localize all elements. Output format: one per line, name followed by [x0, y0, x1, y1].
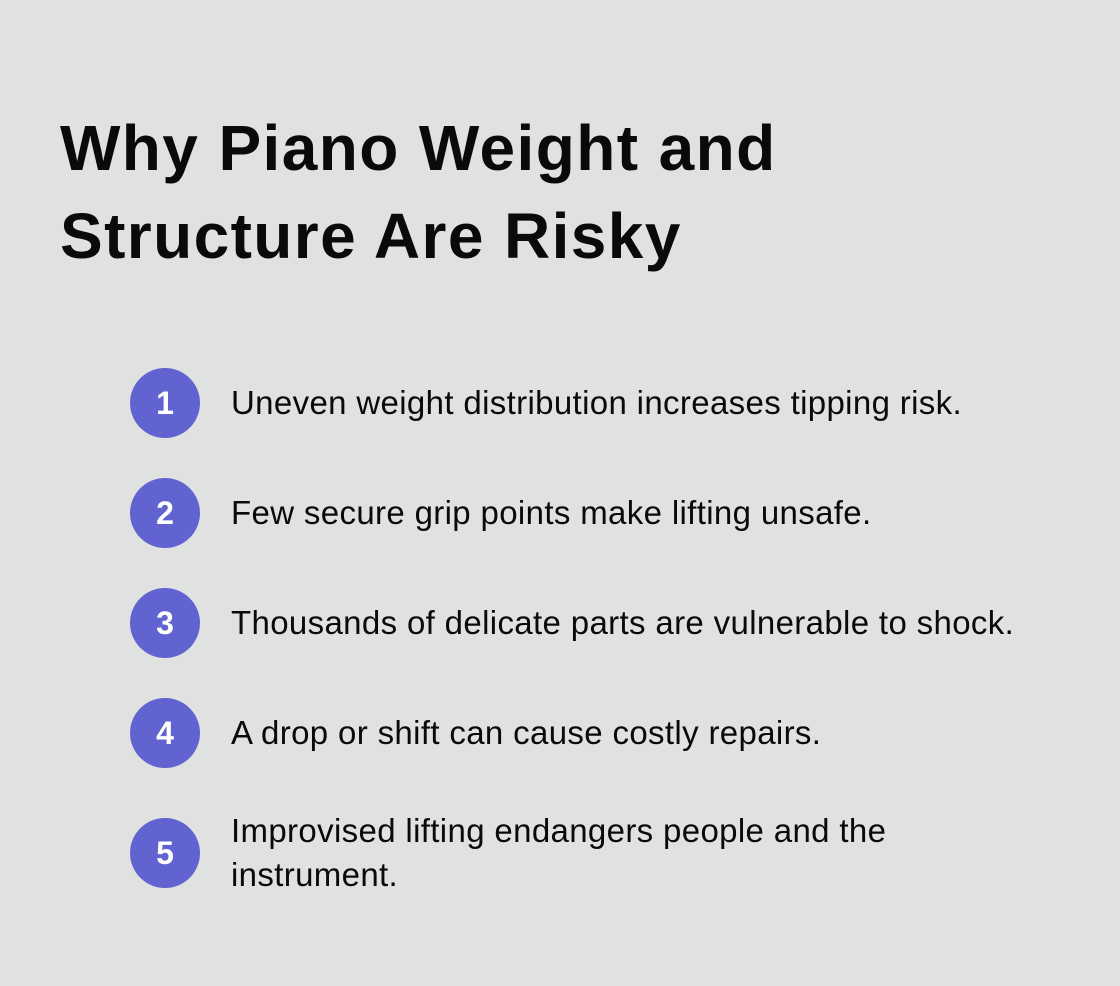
item 3: Thousands of delicate parts are vulnerable to shock. — [231, 604, 1014, 641]
item 2 — [130, 478, 872, 548]
item 4: A drop or shift can cause costly repairs. — [231, 714, 821, 751]
item 4 — [130, 698, 821, 768]
title: Structure Are Risky — [60, 200, 682, 272]
item 5: 5 — [156, 835, 174, 871]
item 5: Improvised lifting endangers people and the instrument. — [231, 812, 886, 893]
item 1: 1 — [156, 385, 174, 421]
item 2: 2 — [156, 495, 174, 531]
item 2: Few secure grip points make lifting unsafe. — [231, 494, 872, 531]
title: Why Piano Weight and — [60, 112, 777, 184]
item 3: 3 — [156, 605, 174, 641]
item 1: Uneven weight distribution increases tipping risk. — [231, 384, 962, 421]
item 1 — [130, 368, 962, 438]
item 4: 4 — [156, 715, 174, 751]
title — [60, 112, 777, 272]
item 3 — [130, 588, 1014, 658]
